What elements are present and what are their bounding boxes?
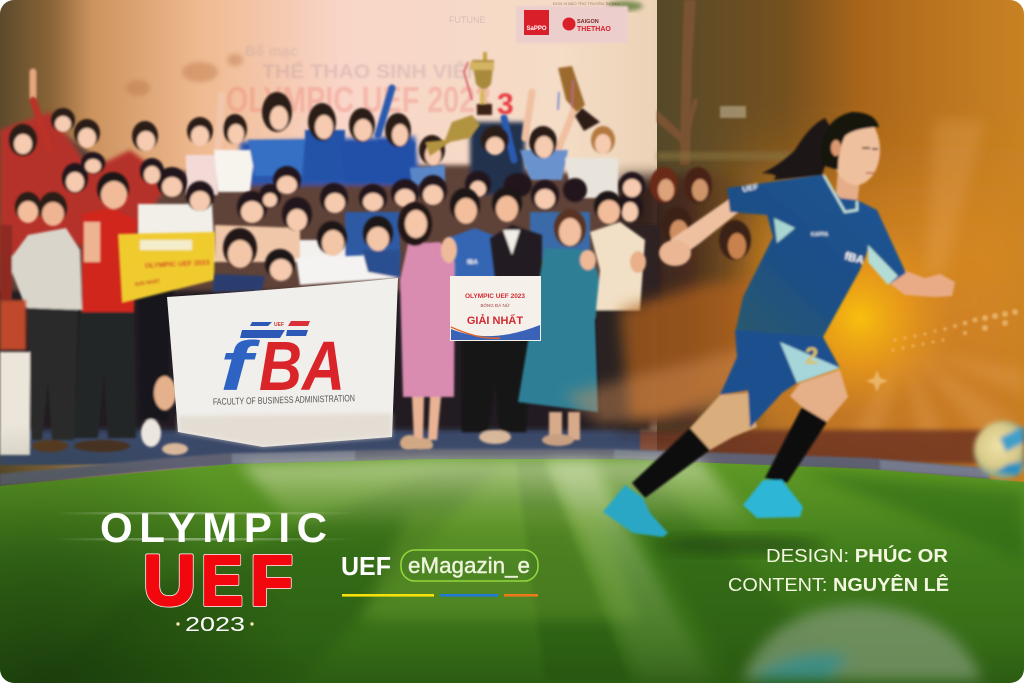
sponsor strip: [516, 6, 628, 43]
background: yellow stadium glow: [765, 223, 955, 413]
player: [603, 112, 955, 537]
FBA logo: [220, 321, 345, 405]
backdrop title: [226, 43, 514, 121]
red shirt left edge: [0, 300, 26, 350]
back thigh: [690, 393, 757, 450]
stage floor: [0, 425, 640, 465]
title: Olympic UEF 2023: [100, 504, 327, 636]
award board: Giải Nhất: OLYMPIC UEF 2023: [465, 293, 525, 300]
shorts: [720, 330, 840, 428]
background: rays: [850, 120, 1024, 440]
sponsor logo: red box: SaPPO: [526, 26, 547, 32]
front arm: [885, 270, 955, 297]
middle heads: [62, 152, 751, 260]
backdrop title: OLYMPIC UEF 2023: [226, 79, 491, 120]
sponsor logo: faint: FUTUNE: [449, 15, 486, 25]
sponsor logo: Sài Gòn Thể Thao: THETHAO: [577, 26, 611, 33]
front thigh: [790, 370, 848, 422]
logo letters BA: BA: [259, 327, 345, 405]
credits: [728, 545, 949, 595]
banner caption: FACULTY OF BUSINESS ADMINISTRATION: [213, 393, 355, 408]
shorts panel: [780, 342, 840, 383]
head: [832, 115, 880, 185]
background: lower orange wash: [740, 130, 1024, 450]
trophy: centre: [464, 52, 494, 115]
turf dark stripe: [516, 462, 630, 680]
trophies: [425, 52, 600, 156]
backdrop sponsors: [449, 1, 628, 43]
woman in pink dress: [398, 202, 457, 452]
turf corner shadow: [0, 423, 300, 683]
trophy: low gold: [425, 115, 480, 156]
backdrop title: Bế mạc: [245, 43, 298, 60]
shirt: [727, 175, 906, 337]
title light streaks: [55, 512, 360, 540]
FBA logo: UEF: [274, 322, 284, 328]
back row heads: [9, 92, 712, 203]
football: [974, 421, 1024, 479]
trophy: tilted right: [558, 66, 600, 131]
sponsor logo: red box: [524, 10, 549, 35]
knee and shoes: [141, 376, 188, 455]
turf horizon fog: [240, 459, 760, 530]
title word: UEF: [143, 542, 293, 621]
turf left dark wedge: [40, 464, 500, 683]
man behind flag: [138, 262, 180, 420]
neck: [835, 170, 860, 205]
middle clothes: [138, 204, 215, 262]
eyes and mouth: [862, 148, 878, 149]
title word: UEF: E: [201, 542, 243, 621]
title word: UEF: U: [143, 542, 196, 621]
woman in teal dress: [518, 209, 606, 446]
boot right: [743, 480, 803, 518]
collar: [824, 175, 857, 212]
man in blue jersey: fBA: [467, 260, 478, 266]
blurred foreground ball: [742, 605, 982, 680]
logo letter f: f: [220, 327, 261, 405]
sponsor logo: Sài Gòn Thể Thao: [562, 18, 611, 33]
chest logo: fBA: [843, 250, 865, 267]
brand: UEF eMagazine: [341, 550, 538, 597]
crowd mass: [0, 112, 650, 430]
brand colour rules: [342, 594, 538, 597]
award board: Giải Nhất: [450, 276, 541, 341]
shirt side panel right: [868, 245, 898, 285]
yellow pennant flag: OLYMPIC UEF 2023: [145, 260, 210, 270]
player: KAPPA: [811, 232, 829, 238]
white podium: [0, 352, 30, 455]
sponsor logo: Sài Gòn Thể Thao: SAIGON: [577, 19, 599, 25]
crowd: back row: [9, 72, 712, 203]
front kneeling girls: [212, 216, 400, 292]
man in red vest: [74, 172, 136, 452]
backdrop title: THỂ THAO SINH VIÊN: [262, 61, 482, 83]
turf far right stripe: [800, 470, 1024, 560]
shorts number: 2: [805, 343, 818, 370]
logo stripes: [240, 322, 308, 338]
yellow pennant flag: GIẢI NHẤT: [134, 277, 161, 288]
right crowd fade: [620, 175, 770, 430]
orange haze over right crowd: [565, 275, 780, 425]
turf pale light streak: [548, 462, 712, 680]
boot left: [603, 485, 668, 537]
sponsor caption: ĐƠN VỊ BẢO TRỢ TRUYỀN THÔNG: [553, 1, 619, 6]
turf bright centre: [360, 510, 640, 620]
background: stadium stands: [620, 430, 1024, 464]
brand word UEF: UEF: [341, 551, 391, 581]
man in black suit: [462, 187, 542, 444]
back arm: [670, 197, 745, 256]
title word: UEF: E: [201, 542, 243, 621]
background: tree trunk and foliage: [607, 0, 807, 165]
brand pill: eMagazin_e: [408, 553, 530, 578]
background: stage backdrop wall: [0, 0, 657, 490]
yellow pennant flag: [118, 232, 215, 303]
design credit: DESIGN: PHÚC OR: [766, 545, 948, 566]
background: backdrop flower marks: [126, 54, 243, 96]
left edge red jackets: [0, 225, 12, 300]
ponytail: [762, 118, 835, 180]
award board: Giải Nhất: BÓNG ĐÁ NỮ: [480, 302, 510, 308]
crowd: men on the left: [0, 172, 188, 455]
hand left: [659, 240, 691, 266]
title year: [176, 614, 254, 636]
crowd: middle row: [62, 152, 751, 300]
title word: UEF: F: [250, 542, 293, 621]
white FBA banner: [167, 278, 398, 447]
background: trees and orange sky: [657, 0, 1024, 490]
raised arms: [33, 72, 575, 160]
advertising boards: [0, 449, 990, 486]
background: stadium lights: [866, 309, 1018, 392]
man in blue jersey: [448, 188, 500, 278]
content credit: CONTENT: NGUYÊN LÊ: [728, 574, 949, 595]
title word: UEF: F: [250, 542, 293, 621]
title word: OLYMPIC: OLYMPIC: [100, 504, 327, 551]
backdrop title: 3: [497, 88, 514, 121]
back row clothes: [186, 155, 218, 195]
title word: UEF: U: [143, 542, 196, 621]
man in cream shirt: [590, 191, 646, 420]
man in light shirt: [8, 192, 82, 452]
turf: [0, 423, 1024, 683]
title year: 2023: [185, 614, 245, 636]
award board: Giải Nhất: GIẢI NHẤT: [467, 314, 523, 327]
player shadow: [655, 536, 825, 554]
socks: [632, 407, 827, 498]
shirt side panel left: [774, 218, 795, 243]
turf right dark stripe: [596, 462, 860, 680]
sleeve print: UEF: [742, 182, 759, 194]
